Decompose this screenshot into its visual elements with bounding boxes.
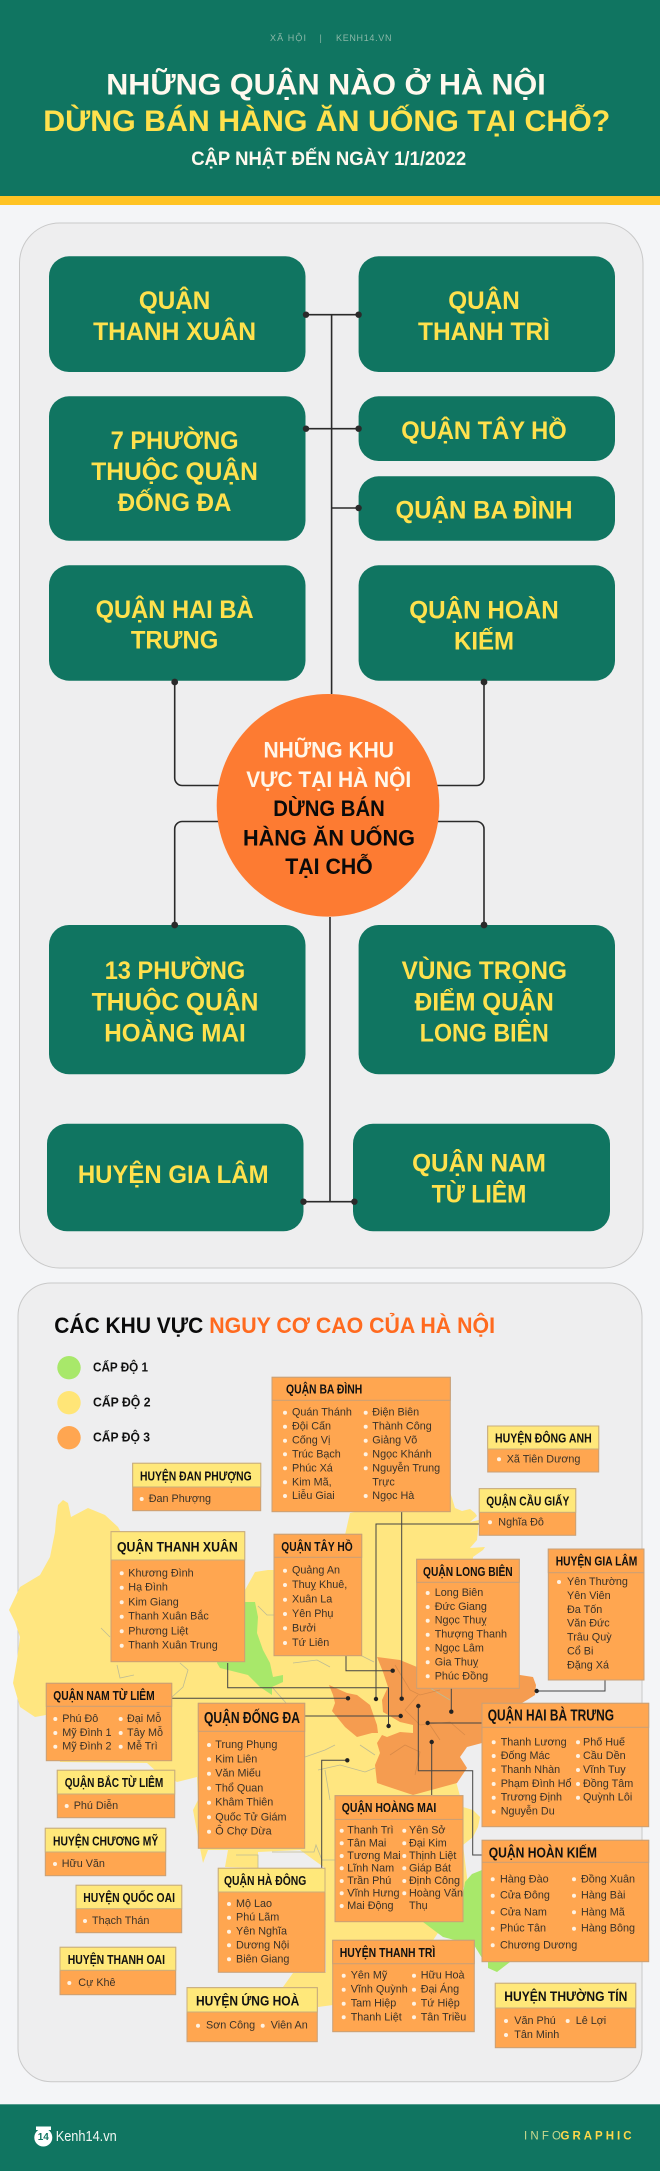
footer	[0, 2104, 660, 2171]
callout: Quận Ba Đình: Đội Cấn	[292, 1421, 331, 1433]
callout: Quận Hoàng Mai: Vĩnh Hưng	[347, 1887, 400, 1899]
callout: Huyện Chương Mỹ: HUYỆN CHƯƠNG MỸ	[53, 1834, 159, 1848]
legend: CẤP ĐỘ 3	[93, 1430, 150, 1445]
callout: Huyện Thanh Trì: Tứ Hiệp	[421, 1998, 460, 2010]
box: Đống Đa	[49, 396, 306, 541]
callout: Quận Bắc Từ Liêm: QUẬN BẮC TỪ LIÊM	[65, 1775, 163, 1790]
box: Long Biên	[359, 925, 615, 1074]
callout: Quận Đống Đa: Trung Phụng	[215, 1739, 277, 1751]
callout: Quận Hai Bà Trưng: Vĩnh Tuy	[583, 1764, 626, 1776]
callout: Huyện Thanh Trì: Tân Triều	[421, 2011, 466, 2023]
callout: Huyện Thanh Oai	[60, 1947, 176, 1995]
callout: Quận Ba Đình	[272, 1377, 450, 1512]
heading: high risk areas	[54, 1313, 495, 1338]
callout: Huyện Đan Phượng: HUYỆN ĐAN PHƯỢNG	[140, 1468, 252, 1484]
callout: Quận Thanh Xuân: Kim Giang	[128, 1596, 179, 1608]
callout: Quận Ba Đình: QUẬN BA ĐÌNH	[286, 1382, 362, 1396]
callout: Huyện Thường Tín: Lê Lợi	[576, 2015, 606, 2027]
callout: Quận Ba Đình: Cống Vị	[292, 1435, 330, 1447]
callout: Quận Ba Đình: Thành Công	[372, 1421, 432, 1433]
callout: Quận Tây Hồ: QUẬN TÂY HỒ	[281, 1539, 353, 1554]
box: Ba Đình: QUẬN BA ĐÌNH	[396, 495, 572, 525]
legend	[57, 1356, 151, 1449]
callout: Quận Ba Đình: Quán Thánh	[292, 1407, 352, 1419]
callout: Quận Hoàng Mai: Hoàng Văn	[409, 1887, 463, 1899]
callout: Quận Hoàng Mai: Định Công	[409, 1875, 460, 1887]
callout: Quận Nam Từ Liêm: Mễ Trì	[127, 1740, 158, 1753]
box: Hoàn Kiếm: KIẾM	[454, 626, 514, 656]
heading: high risk areas: NGUY CƠ CAO CỦA HÀ NỘI	[209, 1313, 495, 1338]
box: Gia Lâm: HUYỆN GIA LÂM	[78, 1159, 269, 1189]
centre circle: DỪNG BÁN	[273, 796, 385, 821]
callout: Quận Ba Đình: Trực	[372, 1476, 395, 1488]
callout: Quận Hoàn Kiếm: Phúc Tân	[500, 1923, 546, 1935]
callout: Huyện Quốc Oai	[76, 1885, 182, 1933]
heading: high risk areas: CÁC KHU VỰC	[54, 1313, 203, 1338]
subtitle: CẬP NHẬT ĐẾN NGÀY 1/1/2022	[191, 146, 466, 170]
callout: Quận Hoàng Mai: QUẬN HOÀNG MAI	[342, 1800, 436, 1815]
logo: Kenh14: Kenh14.vn	[56, 2129, 117, 2145]
callout: Quận Ba Đình: Ngọc Khánh	[372, 1448, 432, 1460]
callout: Quận Hoàng Mai: Trần Phú	[347, 1875, 391, 1887]
callout: Huyện Gia Lâm: Yên Thường	[567, 1576, 628, 1588]
callout: Quận Nam Từ Liêm: Tây Mỗ	[127, 1726, 163, 1739]
box: Đống Đa: THUỘC QUẬN	[91, 456, 258, 486]
callout: Huyện Thanh Trì: Thanh Liệt	[351, 2011, 402, 2023]
box: Tây Hồ	[359, 396, 615, 461]
callout: Quận Tây Hồ: Xuân La	[292, 1594, 332, 1606]
callout: Quận Hai Bà Trưng: QUẬN HAI BÀ TRƯNG	[488, 1706, 614, 1724]
callout: Huyện Quốc Oai: Thạch Thán	[92, 1915, 149, 1927]
callout: Quận Hoàng Mai	[335, 1796, 463, 1922]
callout: Quận Tây Hồ: Tứ Liên	[292, 1637, 329, 1649]
callout: Quận Cầu Giấy: Nghĩa Đô	[498, 1516, 544, 1528]
box: Long Biên: LONG BIÊN	[420, 1017, 549, 1047]
callout: Quận Tây Hồ	[274, 1534, 362, 1656]
callout: Quận Đống Đa: Ô Chợ Dừa	[215, 1825, 272, 1838]
callout: Quận Tây Hồ: Thuỵ Khuê,	[292, 1579, 347, 1591]
callout: Quận Hai Bà Trưng: Đồng Tâm	[583, 1778, 633, 1790]
callout: Quận Hoàn Kiếm: Cửa Đông	[500, 1890, 550, 1902]
callout: Quận Hoàn Kiếm: Hàng Bông	[581, 1923, 635, 1935]
callout: Quận Tây Hồ: Quảng An	[292, 1565, 340, 1577]
callout: Quận Hà Đông	[218, 1868, 325, 1972]
centre circle: TẠI CHỖ	[285, 853, 373, 879]
callout: Huyện Đông Anh: Xã Tiên Dương	[507, 1453, 580, 1465]
panel: high risk areas	[18, 1283, 642, 2082]
callout: Huyện Ứng Hoà: Sơn Công	[206, 2020, 255, 2032]
callout: Quận Hà Đông: QUẬN HÀ ĐÔNG	[224, 1873, 306, 1888]
box: Hoàng Mai: THUỘC QUẬN	[92, 986, 258, 1016]
callout: Quận Tây Hồ: Yên Phụ	[292, 1608, 333, 1620]
callout: Huyện Gia Lâm	[548, 1549, 644, 1680]
callout: Quận Hai Bà Trưng: Thanh Lương	[501, 1736, 567, 1748]
centre circle	[217, 694, 439, 917]
callout: Quận Hai Bà Trưng: Phố Huế	[583, 1736, 625, 1748]
callout: Quận Long Biên: Ngọc Lâm	[435, 1643, 484, 1655]
callout: Quận Thanh Xuân: Thanh Xuân Trung	[128, 1640, 218, 1652]
callout: Quận Hai Bà Trưng: Quỳnh Lôi	[583, 1792, 632, 1804]
callout: Quận Thanh Xuân: Hạ Đình	[128, 1582, 168, 1594]
centre circle: VỰC TẠI HÀ NỘI	[246, 767, 411, 792]
callout: Huyện Chương Mỹ: Hữu Văn	[62, 1858, 105, 1870]
callout: Quận Bắc Từ Liêm	[57, 1770, 175, 1818]
logo: Kenh14	[34, 2126, 117, 2146]
callout: Huyện Thường Tín	[495, 1983, 636, 2048]
callout: Huyện Thanh Oai: HUYỆN THANH OAI	[68, 1952, 165, 1967]
callout: Quận Hai Bà Trưng: Thanh Nhàn	[501, 1764, 560, 1776]
callout: Quận Hoàn Kiếm: Hàng Bài	[581, 1890, 625, 1902]
centre circle: HÀNG ĂN UỐNG	[243, 824, 415, 850]
callout: Quận Hai Bà Trưng: Trương Định	[501, 1792, 562, 1804]
legend: CẤP ĐỘ 1	[93, 1360, 148, 1375]
title: DỪNG BÁN HÀNG ĂN UỐNG TẠI CHỖ?	[43, 104, 610, 138]
box: Nam Từ Liêm	[353, 1124, 610, 1231]
callout: Huyện Quốc Oai: HUYỆN QUỐC OAI	[83, 1890, 175, 1905]
callout: Quận Thanh Xuân	[111, 1532, 245, 1662]
box: Hoàn Kiếm	[359, 565, 615, 681]
source line	[270, 33, 392, 43]
box: Hoàn Kiếm: QUẬN HOÀN	[409, 594, 559, 624]
callout: Quận Ba Đình: Điện Biên	[372, 1407, 419, 1419]
box: Thanh Xuân	[49, 256, 306, 372]
box: Long Biên: ĐIỂM QUẬN	[415, 986, 554, 1016]
callout: Quận Long Biên: Gia Thuỵ	[435, 1656, 479, 1668]
callout: Huyện Gia Lâm: Đặng Xá	[567, 1659, 609, 1671]
box: Hoàng Mai	[49, 925, 306, 1074]
callout: Huyện Gia Lâm: Trâu Quỳ	[567, 1632, 612, 1644]
callout: Huyện Thường Tín: HUYỆN THƯỜNG TÍN	[504, 1987, 627, 2004]
callout: Quận Bắc Từ Liêm: Phú Diễn	[74, 1799, 118, 1812]
box: Thanh Xuân: QUẬN	[139, 285, 210, 315]
infographic wordmark: INFO	[524, 2131, 561, 2143]
callout: Quận Cầu Giấy	[479, 1489, 576, 1535]
source line: KENH14.VN	[336, 33, 392, 43]
callout: Quận Hoàng Mai: Thanh Trì	[347, 1825, 394, 1837]
callout: Quận Ba Đình: Ngọc Hà	[372, 1490, 414, 1502]
callout: Huyện Gia Lâm: Yên Viên	[567, 1590, 611, 1602]
callout: Quận Nam Từ Liêm: Mỹ Đình 2	[62, 1741, 112, 1753]
callout: Huyện Ứng Hoà: Viên An	[271, 2020, 308, 2032]
callout: Quận Hoàn Kiếm: QUẬN HOÀN KIẾM	[489, 1843, 597, 1861]
callout: Quận Hoàng Mai: Tân Mai	[347, 1837, 386, 1849]
callout: Huyện Thanh Trì: Đại Áng	[421, 1983, 459, 1996]
panel: areas diagram	[20, 223, 643, 1268]
callout: Quận Hà Đông: Phú Lãm	[236, 1912, 279, 1924]
callout: Quận Hoàng Mai: Giáp Bát	[409, 1862, 451, 1874]
callout: Quận Hai Bà Trưng: Nguyễn Du	[501, 1805, 555, 1818]
callout: Huyện Gia Lâm: Đa Tốn	[567, 1604, 602, 1616]
box: Gia Lâm	[47, 1124, 304, 1231]
box: Ba Đình	[359, 476, 615, 541]
callout: Quận Long Biên: Phúc Đồng	[435, 1670, 488, 1682]
box: Nam Từ Liêm: QUẬN NAM	[412, 1147, 546, 1177]
callout: Huyện Thanh Trì: Yên Mỹ	[351, 1970, 388, 1982]
map of Hanoi	[9, 1492, 540, 2032]
connector lines	[175, 315, 484, 1202]
header band	[0, 0, 660, 205]
callout: Quận Hà Đông: Biên Giang	[236, 1953, 289, 1965]
callout: Huyện Gia Lâm: Văn Đức	[567, 1618, 610, 1630]
callout: Quận Long Biên: Ngọc Thuỵ	[435, 1615, 487, 1627]
callout: Quận Hoàn Kiếm	[482, 1840, 649, 1962]
callout: Quận Hoàn Kiếm: Cửa Nam	[500, 1906, 547, 1918]
callout: Huyện Đông Anh	[488, 1426, 599, 1472]
box: Thanh Trì: THANH TRÌ	[418, 317, 550, 346]
callout: Huyện Thanh Trì: Vĩnh Quỳnh	[351, 1984, 408, 1996]
legend: CẤP ĐỘ 2	[93, 1395, 151, 1410]
infographic wordmark: GRAPHIC	[560, 2131, 632, 2143]
callout: Quận Đống Đa: Kim Liên	[215, 1753, 257, 1765]
source line: XÃ HỘI	[270, 33, 306, 43]
box: Hoàng Mai: 13 PHƯỜNG	[105, 955, 245, 985]
title: NHỮNG QUẬN NÀO Ở HÀ NỘI	[106, 68, 546, 102]
callout: Quận Ba Đình: Phúc Xá	[292, 1462, 333, 1474]
box: Thanh Xuân: THANH XUÂN	[93, 316, 256, 346]
callout: Huyện Ứng Hoà: HUYỆN ỨNG HOÀ	[196, 1992, 299, 2009]
callout: Huyện Thanh Trì: Tam Hiệp	[351, 1998, 396, 2010]
box: Thanh Trì	[359, 256, 615, 372]
callout: Huyện Thanh Trì	[333, 1940, 474, 2032]
callout: Huyện Đan Phượng	[133, 1463, 261, 1511]
callout: Quận Hoàng Mai: Thụ	[409, 1900, 428, 1912]
callout: Quận Hai Bà Trưng: Phạm Đình Hổ	[501, 1778, 572, 1790]
callout: Quận Hoàng Mai: Lĩnh Nam	[347, 1862, 394, 1874]
callout: Quận Hoàng Mai: Mai Động	[347, 1900, 394, 1912]
callout: Quận Nam Từ Liêm: Đại Mỗ	[127, 1712, 161, 1725]
box: Đống Đa: 7 PHƯỜNG	[111, 425, 239, 455]
centre circle: NHỮNG KHU	[263, 738, 394, 762]
callout: Quận Hoàng Mai: Tương Mai	[347, 1850, 401, 1862]
box: Hai Bà Trưng: TRƯNG	[131, 627, 218, 655]
callout: Quận Hà Đông: Mộ Lao	[236, 1898, 272, 1910]
callout: Quận Hoàn Kiếm: Hàng Mã	[581, 1906, 625, 1918]
callout: Huyện Đông Anh: HUYỆN ĐÔNG ANH	[495, 1430, 592, 1446]
logo: Kenh14: 14	[38, 2132, 49, 2143]
callout: Huyện Thanh Trì: Hữu Hoà	[421, 1970, 465, 1982]
callout: Huyện Đan Phượng: Đan Phượng	[149, 1493, 211, 1505]
box: Thanh Trì: QUẬN	[448, 285, 520, 315]
callout: Huyện Gia Lâm: HUYỆN GIA LÂM	[556, 1554, 637, 1568]
callout: Quận Cầu Giấy: QUẬN CẦU GIẤY	[486, 1494, 570, 1508]
callout: Quận Ba Đình: Nguyễn Trung	[372, 1461, 440, 1474]
callout: Quận Hoàn Kiếm: Đồng Xuân	[581, 1873, 635, 1885]
callout: Quận Hai Bà Trưng	[482, 1703, 649, 1827]
box: Tây Hồ: QUẬN TÂY HỒ	[401, 415, 567, 445]
callout: Quận Hoàn Kiếm: Hàng Đào	[500, 1873, 549, 1885]
callout: Quận Nam Từ Liêm: Mỹ Đình 1	[62, 1727, 112, 1739]
box: Long Biên: VÙNG TRỌNG	[402, 955, 567, 985]
callout: Quận Tây Hồ: Bưởi	[292, 1622, 316, 1634]
box: Đống Đa: ĐỐNG ĐA	[118, 487, 231, 517]
box: Hai Bà Trưng: QUẬN HAI BÀ	[96, 594, 254, 624]
district boundaries	[101, 1606, 450, 1868]
callout: Quận Ba Đình: Trúc Bạch	[292, 1448, 341, 1460]
callout: Quận Long Biên: Thượng Thanh	[435, 1629, 507, 1641]
callout: Quận Thanh Xuân: Phương Liệt	[128, 1625, 188, 1637]
callout: Quận Ba Đình: Kim Mã,	[292, 1476, 332, 1488]
callout: Huyện Thanh Trì: HUYỆN THANH TRÌ	[340, 1945, 435, 1960]
callout: Quận Hoàng Mai: Thịnh Liệt	[409, 1850, 456, 1862]
callout: Quận Thanh Xuân: Thanh Xuân Bắc	[128, 1610, 209, 1623]
callout: Quận Thanh Xuân: QUẬN THANH XUÂN	[117, 1538, 238, 1555]
callout: Quận Đống Đa: Văn Miếu	[215, 1768, 261, 1780]
callout: Quận Hà Đông: Yên Nghĩa	[236, 1926, 287, 1938]
callout: Quận Nam Từ Liêm	[46, 1683, 172, 1761]
callout: Quận Long Biên: Đức Giang	[435, 1601, 487, 1613]
source line: |	[320, 33, 322, 43]
callout: Quận Hoàng Mai: Yên Sở	[409, 1825, 446, 1837]
callout: Quận Hai Bà Trưng: Đống Mác	[501, 1750, 551, 1762]
callout: Quận Hoàng Mai: Đại Kim	[409, 1837, 447, 1849]
callout: Quận Đống Đa	[198, 1703, 305, 1848]
callout: Quận Hà Đông: Dương Nội	[236, 1939, 289, 1951]
callout: Quận Đống Đa: Thổ Quan	[215, 1782, 263, 1794]
callout: Huyện Thường Tín: Văn Phú	[514, 2015, 556, 2027]
callout: Quận Đống Đa: QUẬN ĐỐNG ĐA	[204, 1709, 300, 1727]
leader lines	[171, 1512, 605, 1868]
box: Hai Bà Trưng	[49, 565, 306, 681]
callout: Huyện Ứng Hoà	[187, 1988, 317, 2042]
callout: Quận Long Biên: Long Biên	[435, 1587, 483, 1599]
callout: Quận Hoàn Kiếm: Chương Dương	[500, 1939, 577, 1951]
callout: Huyện Thường Tín: Tân Minh	[514, 2029, 559, 2041]
callout: Huyện Chương Mỹ	[45, 1828, 166, 1876]
callout: Huyện Thanh Oai: Cự Khê	[78, 1977, 116, 1989]
callout: Huyện Gia Lâm: Cổ Bi	[567, 1645, 593, 1657]
callout: Quận Nam Từ Liêm: QUẬN NAM TỪ LIÊM	[53, 1688, 155, 1703]
callout: Quận Thanh Xuân: Khương Đình	[128, 1567, 194, 1579]
title	[43, 68, 610, 138]
infographic wordmark	[524, 2131, 632, 2143]
box: Nam Từ Liêm: TỪ LIÊM	[432, 1178, 526, 1208]
box: Hoàng Mai: HOÀNG MAI	[104, 1018, 246, 1047]
callout: Quận Hai Bà Trưng: Cầu Dền	[583, 1750, 626, 1762]
callout: Quận Ba Đình: Liễu Giai	[292, 1489, 335, 1502]
callout: Quận Nam Từ Liêm: Phú Đô	[62, 1713, 98, 1725]
callout: Quận Đống Đa: Quốc Tử Giám	[215, 1811, 287, 1823]
callout: Quận Long Biên	[417, 1559, 519, 1688]
callout: Quận Ba Đình: Giảng Võ	[372, 1435, 417, 1447]
connector dots	[171, 312, 487, 1205]
callout: Quận Long Biên: QUẬN LONG BIÊN	[423, 1564, 513, 1579]
callout: Quận Đống Đa: Khâm Thiên	[215, 1797, 273, 1809]
